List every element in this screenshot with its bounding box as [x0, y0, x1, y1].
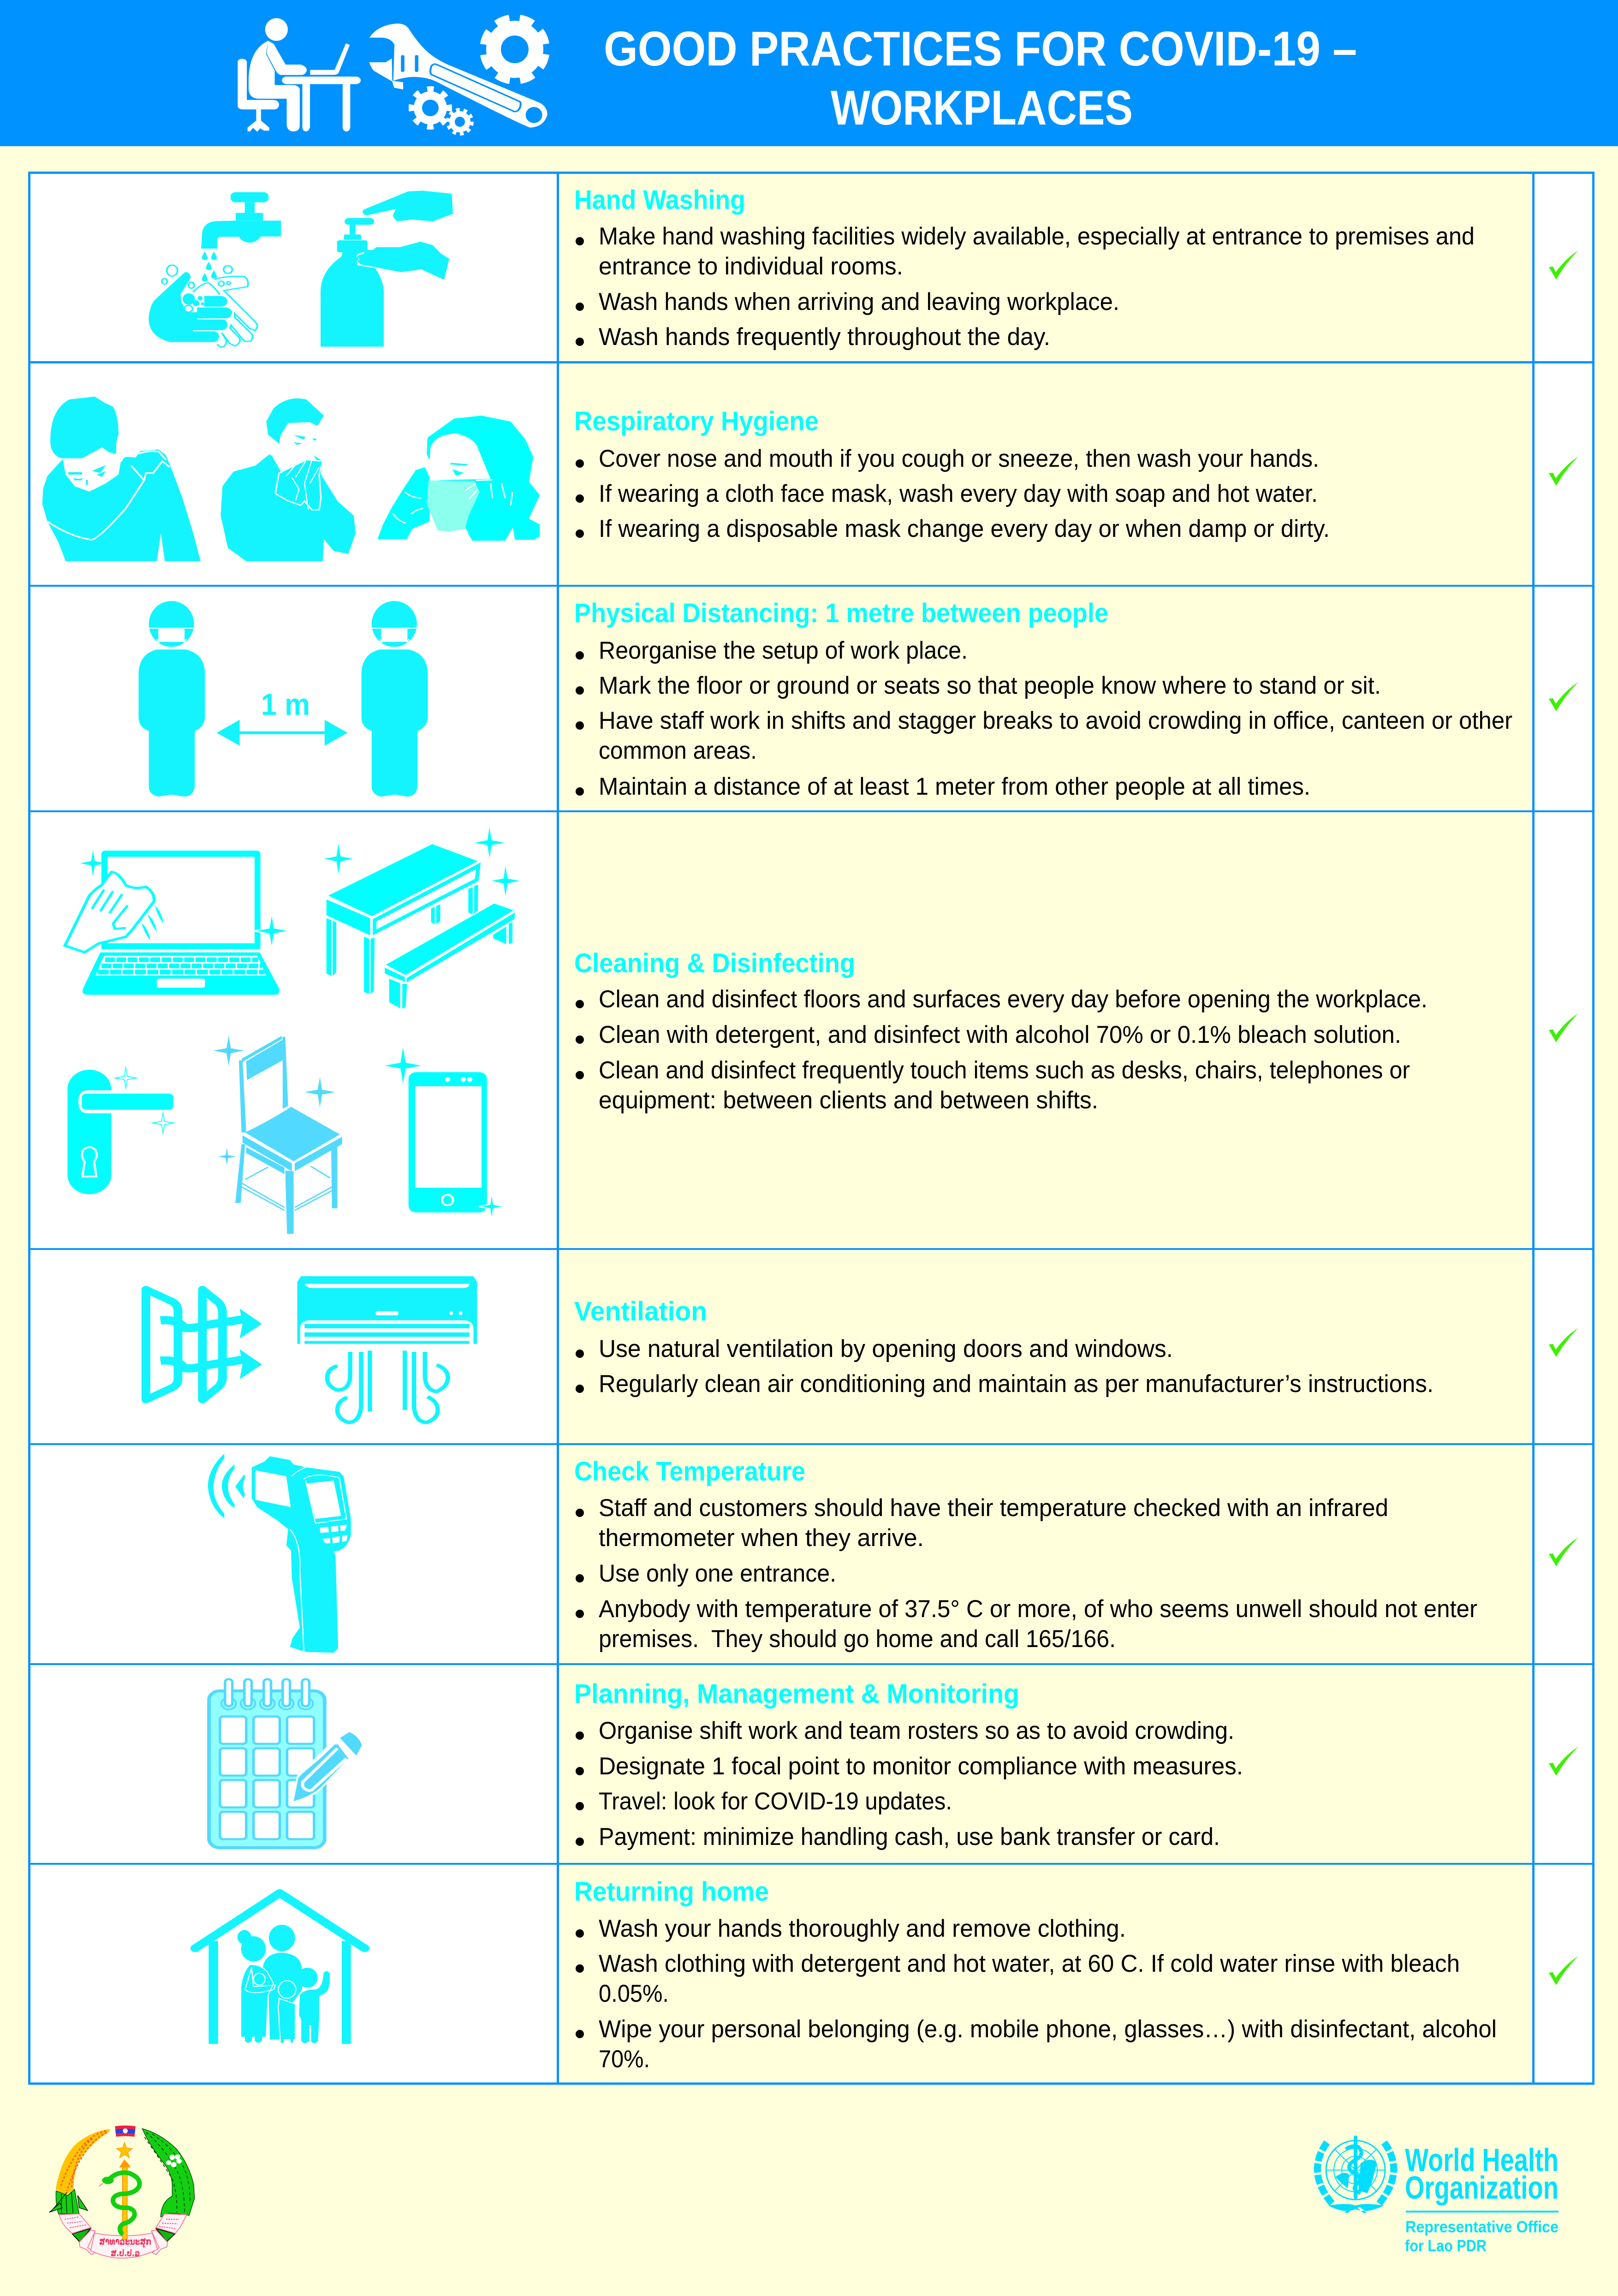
icon: spiral calendar and pencil — [209, 1679, 362, 1848]
icon: washing hands under tap — [149, 192, 281, 347]
row: returning home — [195, 1877, 1497, 2073]
figure: left person — [139, 601, 205, 797]
icon: infrared thermometer — [208, 1454, 351, 1653]
text: hand washing: Hand Washing — [574, 185, 745, 215]
text: cleaning and disinfecting: Clean with detergent, and disinfect with alcohol 70% or 0.1% bleach solution. — [599, 1021, 1401, 1048]
rod and serpent — [99, 2159, 139, 2239]
text: respiratory hygiene: If wearing a cloth face mask, wash every day with soap and hot water. — [599, 480, 1318, 507]
text: returning home: Wash clothing with detergent and hot water, at 60 C. If cold water rinse with bleach — [599, 1950, 1460, 1977]
text: hand washing: Make hand washing facilities widely available, especially at entrance to premises and — [599, 223, 1475, 250]
icon: worker at desk — [238, 18, 361, 132]
text: respiratory hygiene: If wearing a disposable mask change every day or when damp or dirty. — [599, 515, 1330, 542]
text: cleaning and disinfecting: Clean and disinfect frequently touch items such as desks, chairs, telephones or — [599, 1057, 1410, 1084]
text: planning, management and monitoring — [574, 1679, 1243, 1850]
text: WHO wordmark: Organization — [1405, 2170, 1559, 2206]
text: planning, management and monitoring: Travel: look for COVID-19 updates. — [599, 1788, 952, 1815]
text: WHO wordmark: for Lao PDR — [1405, 2237, 1487, 2255]
text: cleaning and disinfecting: Clean and disinfect floors and surfaces every day before opening the workplace. — [599, 986, 1428, 1013]
header banner — [0, 0, 1618, 146]
text: respiratory hygiene — [574, 406, 1330, 542]
text: check temperature: premises. They should go home and call 165/166. — [599, 1625, 1116, 1653]
text: ventilation — [574, 1297, 1434, 1398]
wheat sheaf — [49, 2129, 110, 2214]
text: ventilation: Ventilation — [574, 1297, 707, 1326]
text: returning home: 70%. — [599, 2046, 650, 2073]
row: check temperature — [208, 1454, 1477, 1653]
icon: chair — [214, 1035, 342, 1234]
text: WHO wordmark: World Health — [1405, 2142, 1559, 2178]
text: returning home — [574, 1877, 1497, 2073]
text: planning, management and monitoring: Planning, Management & Monitoring — [574, 1679, 1019, 1709]
text: hand washing: Wash hands frequently throughout the day. — [599, 323, 1050, 351]
icon: hand sanitizer dispenser — [321, 190, 453, 347]
text: ventilation: Use natural ventilation by opening doors and windows. — [599, 1335, 1173, 1362]
text: returning home: 0.05%. — [599, 1980, 669, 2007]
icon: family in house — [195, 1893, 365, 2044]
text: physical distancing: Physical Distancing: 1 metre between people — [574, 598, 1108, 628]
icon: two masked people one metre apart — [139, 601, 428, 797]
row: planning, management and monitoring — [209, 1679, 1243, 1850]
label: 1 m: 1 m — [261, 687, 310, 721]
text: WHO wordmark — [1405, 2142, 1559, 2255]
text: Lao scroll: ສາທາລະນະສຸກ — [99, 2236, 151, 2249]
text: check temperature: Staff and customers should have their temperature checked with an infrared — [599, 1494, 1388, 1522]
text: planning, management and monitoring: Designate 1 focal point to monitor compliance with measures. — [599, 1753, 1243, 1780]
text: cleaning and disinfecting — [574, 948, 1428, 1114]
icon: air conditioner — [297, 1276, 477, 1422]
icon: wiping laptop — [65, 850, 290, 995]
icon: coughing into elbow — [42, 397, 201, 561]
icon: wrench — [369, 24, 547, 128]
icon: small gears — [409, 86, 472, 134]
flag — [115, 2125, 136, 2137]
row: respiratory hygiene — [42, 397, 1330, 561]
icon: person putting on mask — [377, 416, 540, 541]
text: hand washing: entrance to individual rooms. — [599, 253, 903, 280]
row: physical distancing — [139, 598, 1512, 800]
text: check temperature: thermometer when they arrive. — [599, 1524, 924, 1552]
text: cleaning and disinfecting: equipment: between clients and between shifts. — [599, 1087, 1098, 1114]
text: physical distancing: Reorganise the setup of work place. — [599, 637, 968, 664]
text: respiratory hygiene: Cover nose and mouth if you cough or sneeze, then wash your hands. — [599, 445, 1319, 472]
text: respiratory hygiene: Respiratory Hygiene — [574, 406, 819, 436]
title — [604, 22, 1357, 135]
text: returning home: Wash your hands thoroughly and remove clothing. — [599, 1915, 1126, 1942]
leaf branch — [142, 2129, 195, 2217]
figure: right person — [362, 601, 428, 797]
text: check temperature — [574, 1457, 1477, 1653]
text: hand washing — [574, 185, 1475, 351]
icon: sneezing into tissue — [220, 399, 356, 561]
arrow: double-headed distance — [217, 720, 348, 746]
text: Lao scroll: ສ.ປ.ປ.ລ — [111, 2248, 140, 2259]
row: hand washing — [149, 185, 1475, 351]
text: planning, management and monitoring: Payment: minimize handling cash, use bank transfer or card. — [599, 1823, 1220, 1850]
icon: open window with airflow — [146, 1290, 262, 1400]
icon: door handle — [67, 1065, 176, 1194]
title: GOOD PRACTICES FOR COVID-19 – — [604, 22, 1357, 76]
text: cleaning and disinfecting: Cleaning & Disinfecting — [574, 948, 855, 978]
text: check temperature: Check Temperature — [574, 1457, 805, 1487]
text: hand washing: Wash hands when arriving and leaving workplace. — [599, 288, 1119, 315]
row: ventilation — [146, 1276, 1434, 1422]
check marks column — [1549, 250, 1578, 1985]
text: planning, management and monitoring: Organise shift work and team rosters so as to avoid crowding. — [599, 1717, 1234, 1744]
icon: large gear — [479, 13, 551, 85]
text: returning home: Wipe your personal belonging (e.g. mobile phone, glasses…) with disinfectant, alcohol — [599, 2016, 1497, 2043]
text: physical distancing: Mark the floor or ground or seats so that people know where to stand or sit. — [599, 672, 1381, 699]
title: WORKPLACES — [831, 81, 1133, 135]
text: physical distancing: common areas. — [599, 737, 757, 764]
text: physical distancing: Have staff work in shifts and stagger breaks to avoid crowding in office, canteen or other — [599, 707, 1512, 734]
text: physical distancing — [574, 598, 1512, 800]
logo: Lao Ministry of Health emblem — [49, 2125, 195, 2259]
icon: table and bench — [324, 827, 519, 1009]
text: physical distancing: Maintain a distance of at least 1 meter from other people at all times. — [599, 773, 1310, 800]
text: returning home: Returning home — [574, 1877, 769, 1907]
text: Lao scroll — [99, 2236, 151, 2259]
ribbon and scroll — [59, 2214, 187, 2258]
row: cleaning and disinfecting — [65, 827, 1428, 1234]
text: check temperature: Anybody with temperature of 37.5° C or more, of who seems unwell should not enter — [599, 1595, 1477, 1623]
star — [117, 2142, 132, 2158]
text: ventilation: Regularly clean air conditioning and maintain as per manufacturer’s instructions. — [599, 1370, 1434, 1398]
icon: smartphone — [385, 1047, 505, 1220]
text: WHO wordmark: Representative Office — [1405, 2218, 1559, 2236]
text: check temperature: Use only one entrance. — [599, 1560, 836, 1587]
logo: WHO emblem — [1317, 2135, 1394, 2213]
